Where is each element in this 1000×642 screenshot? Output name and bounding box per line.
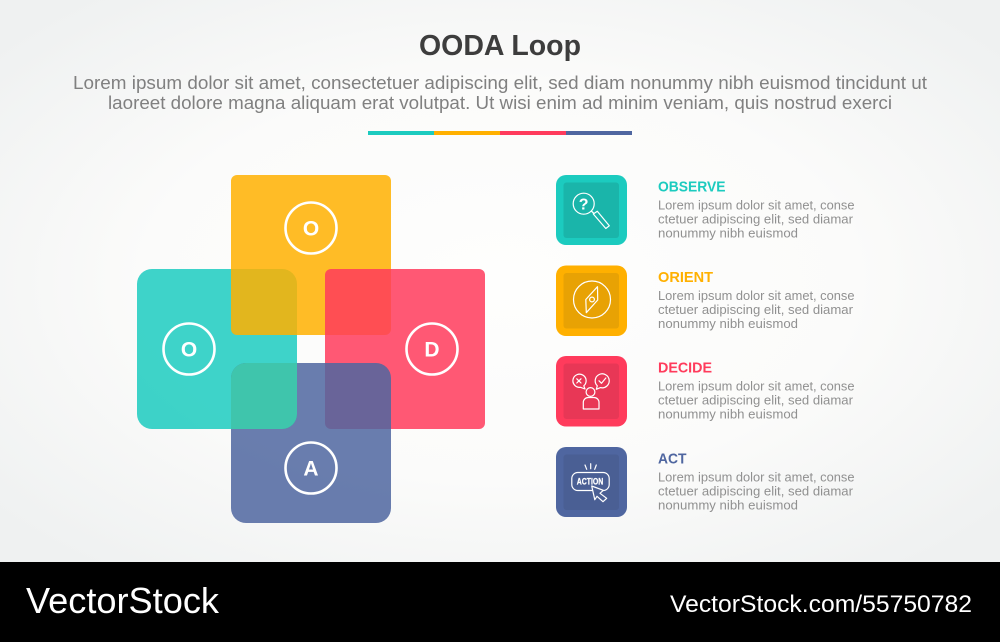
- badge: O top: [286, 202, 336, 254]
- subtitle text: [73, 72, 927, 113]
- colour bar: [368, 131, 632, 135]
- text: decide: DECIDE: [658, 360, 712, 377]
- square: observe: [137, 269, 297, 429]
- title: OODA Loop: [419, 30, 581, 62]
- icon: orient compass: [556, 266, 627, 336]
- text: act: [658, 450, 854, 512]
- text: decide: ctetuer adipiscing elit, sed diamar: [658, 393, 854, 408]
- text: act: ctetuer adipiscing elit, sed diamar: [658, 483, 854, 498]
- icon: act button with cursor: ACTION: [577, 477, 603, 487]
- square: orient: [231, 175, 391, 335]
- icon: act button with cursor: [556, 447, 627, 517]
- icon: observe magnifier: [556, 175, 627, 245]
- text: act: ACT: [658, 450, 686, 467]
- cross diagram of overlapping squares: [137, 175, 485, 523]
- text: observe: nonummy nibh euismod: [658, 226, 798, 240]
- text: orient: Lorem ipsum dolor sit amet, conse: [658, 288, 854, 303]
- text: decide: nonummy nibh euismod: [658, 407, 798, 422]
- badge: O left: O: [181, 338, 197, 362]
- subtitle text: laoreet dolore magna aliquam erat volutpat. Ut wisi enim ad minim veniam, quis nostrud exerci: [108, 92, 892, 113]
- text: observe: Lorem ipsum dolor sit amet, conse: [658, 198, 854, 212]
- overlap: observe and act: [231, 363, 297, 429]
- subtitle text: Lorem ipsum dolor sit amet, consectetuer adipiscing elit, sed diam nonummy nibh euismod tincidunt ut: [73, 72, 927, 93]
- text: orient: [658, 269, 854, 331]
- footer url text: VectorStock.com/55750782: [670, 591, 972, 618]
- text: decide: Lorem ipsum dolor sit amet, conse: [658, 379, 854, 394]
- text: act: nonummy nibh euismod: [658, 497, 798, 512]
- footer logo text: VectorStock: [26, 580, 220, 621]
- text: act: Lorem ipsum dolor sit amet, conse: [658, 469, 854, 484]
- badge: O left: [164, 324, 214, 374]
- text: decide: [658, 360, 854, 422]
- text: observe: ctetuer adipiscing elit, sed diamar: [658, 212, 854, 226]
- badge: D right: D: [424, 338, 440, 362]
- square: decide: [325, 269, 485, 429]
- badge: A bottom: [286, 442, 336, 494]
- badge: D right: [406, 324, 458, 374]
- text: orient: ctetuer adipiscing elit, sed diamar: [658, 302, 854, 317]
- text: observe: OBSERVE: [658, 178, 726, 196]
- text: observe: [658, 178, 854, 240]
- footer band: [0, 562, 1000, 642]
- badge: O top: O: [303, 218, 319, 240]
- icon: observe magnifier: ?: [579, 196, 589, 214]
- text: orient: ORIENT: [658, 269, 713, 286]
- badge: A bottom: A: [303, 458, 319, 480]
- square: act: [231, 363, 391, 523]
- text: orient: nonummy nibh euismod: [658, 316, 798, 331]
- icon: decide person with bubbles: [556, 356, 627, 426]
